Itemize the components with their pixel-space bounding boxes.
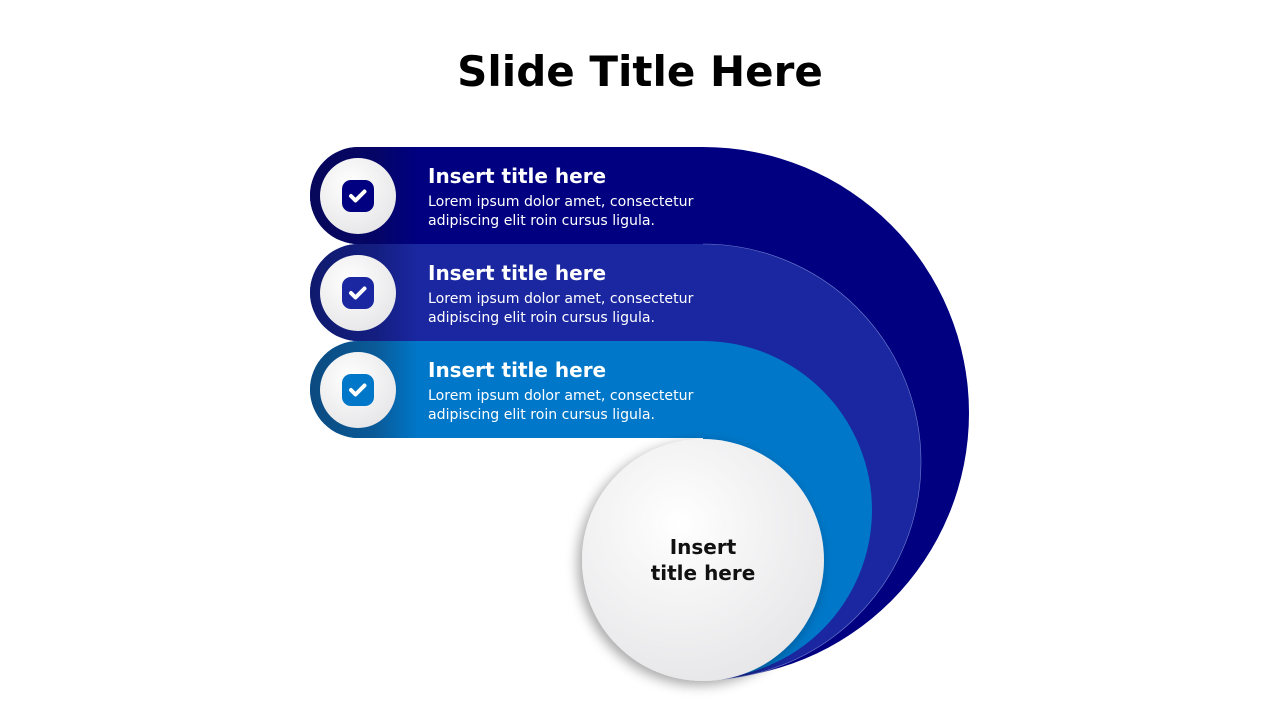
text 2: Lorem ipsum dolor amet, consectetur bbox=[428, 291, 694, 307]
title: Slide Title Here bbox=[457, 47, 823, 96]
icon 1 bbox=[320, 158, 396, 234]
center circle bbox=[582, 439, 824, 681]
center circle: Insert bbox=[670, 535, 737, 559]
band 2 bbox=[310, 244, 921, 680]
text 3 bbox=[428, 358, 694, 423]
icon 2 bbox=[320, 255, 396, 331]
icon 3 bbox=[320, 352, 396, 428]
center circle: title here bbox=[651, 561, 755, 585]
text 3: Insert title here bbox=[428, 358, 606, 382]
text 2 bbox=[428, 261, 694, 326]
text 1 bbox=[428, 164, 694, 229]
text 1: adipiscing elit roin cursus ligula. bbox=[428, 213, 655, 229]
text 3: adipiscing elit roin cursus ligula. bbox=[428, 407, 655, 423]
band 1 bbox=[310, 147, 969, 679]
text 1: Insert title here bbox=[428, 164, 606, 188]
text 2: Insert title here bbox=[428, 261, 606, 285]
text 3: Lorem ipsum dolor amet, consectetur bbox=[428, 388, 694, 404]
text 2: adipiscing elit roin cursus ligula. bbox=[428, 310, 655, 326]
band 3 bbox=[310, 341, 872, 679]
text 1: Lorem ipsum dolor amet, consectetur bbox=[428, 194, 694, 210]
